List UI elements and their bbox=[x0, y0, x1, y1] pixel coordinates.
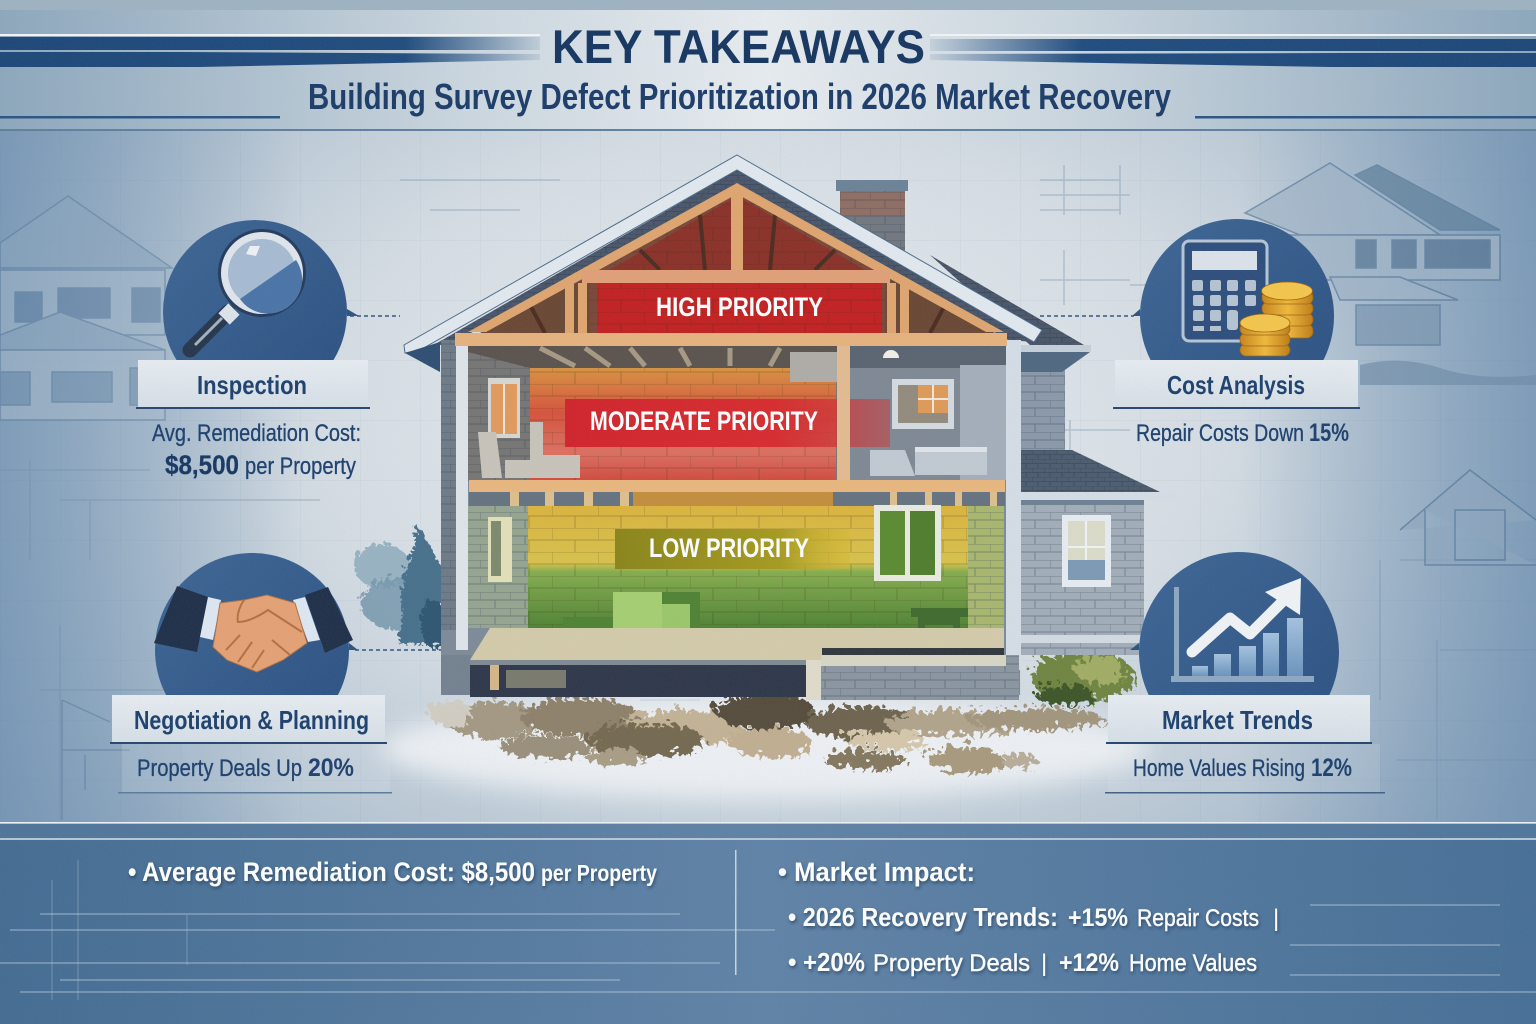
label: cost analysis: Cost Analysis bbox=[1167, 370, 1305, 400]
ghost house right bbox=[1245, 163, 1536, 565]
title: KEY TAKEAWAYS bbox=[552, 20, 925, 73]
stat: average cost: Avg. Remediation Cost: bbox=[152, 420, 361, 447]
stat: home values: 12% bbox=[1311, 754, 1352, 782]
green boxes bbox=[613, 592, 662, 632]
stat: average cost: per Property bbox=[245, 453, 356, 480]
ceiling lamp bbox=[883, 350, 899, 358]
ground foliage bbox=[380, 646, 1150, 798]
deck bbox=[470, 628, 1004, 665]
stat: property deals: Property Deals Up bbox=[137, 755, 302, 782]
label: negotiation and planning: Negotiation & Planning bbox=[134, 705, 369, 735]
icon: magnifying glass bbox=[163, 220, 358, 360]
garden window bbox=[874, 505, 941, 581]
stat: home values bbox=[1105, 744, 1385, 794]
moderate priority band: MODERATE PRIORITY bbox=[590, 406, 818, 436]
furniture left bbox=[478, 422, 580, 478]
label: market trends bbox=[1106, 695, 1372, 744]
panel: cost analysis bbox=[1113, 219, 1360, 447]
trusses bbox=[455, 183, 1007, 346]
title rules right bbox=[930, 34, 1536, 118]
stat: home values: Home Values Rising bbox=[1133, 755, 1305, 782]
upper floor bbox=[468, 346, 1006, 492]
ghost house left bbox=[0, 196, 172, 820]
foundation bbox=[470, 655, 1019, 700]
subtitle: Building Survey Defect Prioritization in 2026 Market Recovery bbox=[308, 76, 1171, 117]
high priority band: HIGH PRIORITY bbox=[656, 292, 823, 322]
icon: handshake bbox=[154, 553, 358, 695]
label: inspection: Inspection bbox=[197, 370, 307, 400]
house illustration bbox=[404, 155, 1174, 700]
market impact list: • 2026 Recovery Trends: bbox=[788, 902, 1058, 932]
label: inspection bbox=[136, 360, 370, 409]
panel: market trends bbox=[1105, 552, 1385, 794]
roof bbox=[404, 155, 1084, 372]
cost summary: • Average Remediation Cost: $8,500 bbox=[128, 857, 535, 887]
market impact list: +15% bbox=[1068, 904, 1128, 932]
label: market trends: Market Trends bbox=[1162, 705, 1313, 735]
stat: repair costs: Repair Costs Down bbox=[1136, 420, 1304, 447]
stat: average cost bbox=[152, 420, 361, 480]
window right bbox=[892, 379, 954, 429]
header band bbox=[0, 0, 1536, 131]
icon: rising chart bbox=[1130, 552, 1339, 695]
market impact list: • Market Impact: bbox=[778, 857, 975, 887]
title rules left bbox=[0, 34, 540, 118]
floor beam bbox=[469, 480, 1005, 506]
low priority band bbox=[615, 529, 850, 569]
house body bbox=[441, 340, 1021, 695]
stat: property deals bbox=[118, 744, 392, 794]
right annex bbox=[1020, 345, 1174, 655]
window left bbox=[488, 378, 520, 438]
attic bbox=[455, 183, 1007, 346]
furniture right bbox=[870, 450, 987, 476]
panel: inspection bbox=[136, 220, 370, 480]
label: cost analysis bbox=[1113, 360, 1360, 409]
connector lines bbox=[350, 316, 1136, 650]
label: negotiation and planning bbox=[110, 695, 387, 744]
stat: average cost: $8,500 bbox=[165, 450, 239, 480]
tree bbox=[350, 522, 444, 644]
market impact list: Property Deals bbox=[873, 950, 1030, 977]
cost summary: per Property bbox=[541, 860, 657, 886]
panel: negotiation and planning bbox=[110, 553, 392, 794]
market impact list: • +20% bbox=[788, 947, 865, 977]
market impact list: Repair Costs bbox=[1137, 905, 1259, 932]
lower floor bbox=[468, 505, 1004, 640]
footer panel bbox=[0, 822, 1536, 1024]
moderate priority band bbox=[565, 399, 890, 447]
left window bbox=[488, 517, 512, 582]
market impact list: | bbox=[1273, 905, 1279, 932]
market impact list bbox=[778, 857, 1279, 977]
icon: calculator and coins bbox=[1132, 219, 1334, 360]
stat: repair costs: 15% bbox=[1309, 419, 1349, 447]
low priority band: LOW PRIORITY bbox=[649, 533, 809, 563]
market impact list: Home Values bbox=[1129, 950, 1257, 977]
stat: property deals: 20% bbox=[308, 754, 354, 782]
market impact list: +12% bbox=[1059, 949, 1119, 977]
chimney bbox=[836, 180, 908, 260]
market impact list: | bbox=[1041, 950, 1047, 977]
high priority band bbox=[597, 282, 882, 333]
